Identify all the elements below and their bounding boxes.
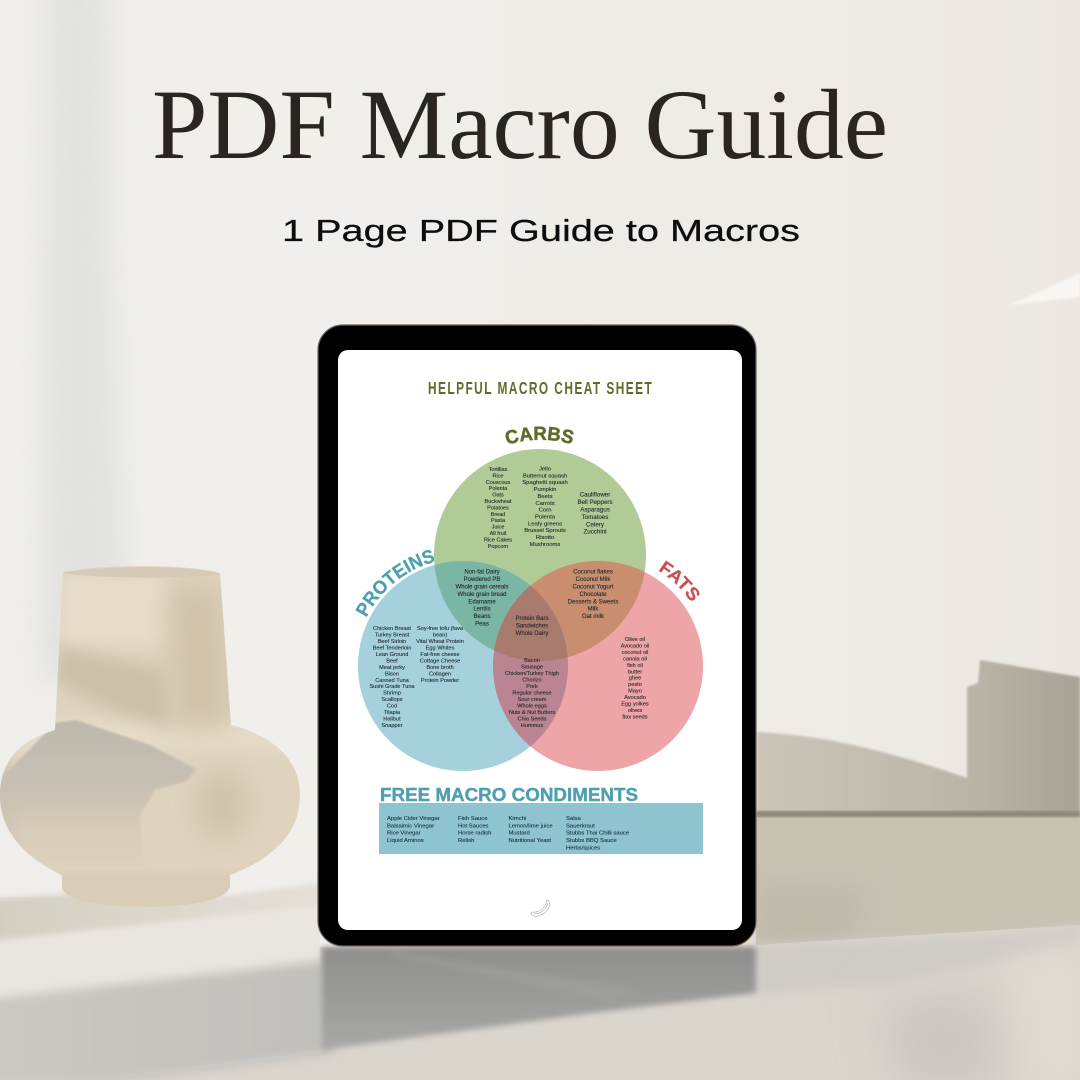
carbs list 2: Jello — [539, 466, 552, 472]
proteins list 1: Bison — [385, 671, 399, 677]
proteins list 1: Snapper — [381, 723, 403, 729]
carbs and fats list: Coconut Yogurt — [572, 584, 614, 590]
condiments column 2: Horse radish — [458, 831, 491, 837]
condiments column 4: Sauerkraut — [566, 823, 595, 829]
proteins and fats list: Nuts & Nut Butters — [509, 710, 555, 716]
proteins and fats list: Chicken/Turkey Thigh — [505, 671, 559, 677]
carbs list 2: Spaghetti squash — [522, 480, 568, 486]
tablet — [317, 324, 757, 947]
carbs list 1: All fruit — [490, 531, 507, 537]
icon: ceramic vase — [0, 560, 305, 912]
carbs list 3: Celery — [586, 521, 605, 528]
proteins list 2: Fat-free cheese — [420, 652, 460, 658]
carbs and proteins list: Non-fat Dairy — [464, 570, 500, 576]
proteins list 2: Cottage Cheese — [420, 658, 460, 664]
proteins list 1: Cod — [387, 704, 397, 710]
panel background — [379, 803, 703, 854]
carbs list 3: Asparagus — [580, 506, 610, 514]
proteins list 1: Turkey Breast — [375, 632, 410, 638]
carbs list 3: Zucchini — [583, 529, 607, 536]
carbs list 2: Corn — [539, 508, 551, 514]
carbs list 1: Bread — [491, 512, 505, 518]
proteins list 1: Beef — [386, 658, 398, 664]
subtitle: 1 Page PDF Guide to Macros — [282, 213, 800, 248]
carbs list 1: Juice — [492, 525, 504, 531]
proteins list 2: Bone broth — [426, 665, 454, 671]
proteins list 1: Beef Tenderloin — [373, 645, 411, 651]
condiments column 3: Kimchi — [508, 816, 526, 822]
fats list: butter — [628, 669, 642, 675]
condiments column 4: Herbs/spices — [566, 845, 600, 851]
label: carbs: CARBS — [506, 426, 574, 444]
proteins and fats list: Sausage — [521, 664, 543, 670]
fats list: flax seeds — [622, 714, 648, 720]
wall shadow — [757, 660, 1080, 815]
carbs list 1: Rice — [492, 473, 504, 479]
condiments panel — [379, 803, 703, 854]
fats list: Avocado oil — [621, 644, 649, 650]
condiments column 4: Stubbs BBQ Sauce — [566, 838, 617, 844]
proteins list 2: bean) — [433, 632, 447, 638]
condiments column 2: Relish — [458, 838, 474, 844]
title: PDF Macro Guide — [152, 69, 888, 180]
fats list: olives — [628, 708, 642, 714]
all three macros list: Protein Bars — [515, 616, 549, 622]
carbs list 2: Butternut squash — [523, 473, 567, 479]
carbs list 2: Mushrooms — [530, 542, 560, 548]
condiments column 3: Lemon/lime juice — [508, 823, 553, 829]
proteins list 1: Shrimp — [383, 691, 401, 697]
all three macros list: Sandwiches — [516, 623, 548, 629]
carbs list 2: Beets — [537, 494, 553, 500]
fats list: Avocado — [624, 695, 646, 701]
proteins and fats list: Pork — [526, 684, 538, 690]
carbs list 1: Rice Cakes — [484, 537, 512, 543]
condiments column 1: Balsalmic Vinegar — [387, 823, 434, 829]
carbs and proteins list: Whole grain cereals — [455, 584, 509, 590]
carbs list 3: Tomatoes — [582, 514, 608, 521]
proteins and fats list: Chorizo — [522, 678, 542, 684]
carbs and proteins list: Lentils — [473, 607, 491, 613]
carbs list 1: Potatoes — [487, 505, 509, 511]
carbs list 1: Polenta — [489, 486, 508, 492]
condiments column 4: Stubbs Thai Chilli sauce — [566, 831, 630, 837]
proteins and fats list: Sour cream — [518, 697, 547, 703]
proteins list 2: Vital Wheat Protein — [416, 639, 464, 645]
overlap: carbs and fats — [494, 561, 644, 658]
carbs and fats list: Coconut flakes — [573, 570, 613, 576]
carbs and proteins list: Peas — [475, 622, 489, 628]
carbs and fats list: Milk — [588, 607, 599, 613]
carbs and proteins list: Whole grain bread — [457, 592, 507, 598]
venn diagram — [355, 426, 703, 771]
proteins list 1: Canned Tuna — [375, 678, 410, 684]
carbs list 2: Polenta — [535, 514, 556, 520]
proteins list 1: Tilapia — [384, 710, 401, 716]
proteins and fats list: Whole eggs — [517, 704, 547, 710]
proteins list 1: Lean Ground — [376, 652, 408, 658]
fats list: canola oil — [623, 656, 647, 662]
carbs list 2: Risotto — [536, 535, 555, 541]
proteins list 2: Egg Whites — [426, 645, 455, 651]
proteins list 2: Soy-free tofu (fava — [417, 626, 464, 632]
condiments column 2: Fish Sauce — [458, 816, 488, 822]
carbs list 3: Bell Peppers — [577, 499, 613, 506]
overlap: all three — [494, 586, 568, 661]
proteins and fats list: Regular cheese — [512, 690, 552, 696]
condiments column 2: Hot Sauces — [458, 823, 489, 829]
label: fats: FATS — [658, 560, 700, 601]
tablet screen — [338, 350, 742, 930]
carbs and fats list: Oat milk — [582, 614, 605, 620]
cheat sheet heading: HELPFUL MACRO CHEAT SHEET — [428, 379, 652, 399]
proteins list 1: Scallops — [381, 697, 403, 703]
fats list: pesto — [628, 682, 642, 688]
proteins list 1: Beef Sirloin — [378, 639, 406, 645]
carbs list 2: Brussel Sprouts — [524, 528, 566, 534]
condiments column 3: Nutritional Yeast — [508, 838, 551, 844]
carbs and fats list: Desserts & Sweets — [568, 599, 618, 605]
condiments column 1: Rice Vinegar — [387, 831, 421, 837]
fats list: Mayo — [628, 689, 642, 695]
carbs list 3: Cauliflower — [580, 492, 610, 499]
tablet frame — [318, 325, 756, 946]
proteins and fats list: Hummus — [521, 723, 543, 729]
carbs and proteins list: Edamame — [468, 599, 496, 605]
carbs and fats list: Chocolate — [579, 592, 607, 598]
circle: carbs — [434, 449, 646, 661]
carbs list 1: Oats — [492, 493, 504, 499]
proteins list 2: Protein Powder — [421, 678, 459, 684]
carbs and proteins list: Beans — [473, 614, 491, 620]
circle: proteins — [358, 561, 568, 771]
carbs list 2: Pumpkin — [534, 487, 556, 493]
fats list: Egg yolkes — [621, 702, 649, 708]
proteins list 1: Chicken Breast — [373, 626, 411, 632]
fats list: Olive oil — [625, 637, 645, 643]
condiments column 1: Apple Cider Vinegar — [387, 816, 440, 822]
overlap: proteins and fats — [493, 590, 568, 746]
carbs list 1: Pasta — [491, 518, 506, 524]
proteins list 1: Halibut — [383, 717, 401, 723]
proteins list 2: Collagen — [429, 671, 451, 677]
proteins list 1: Sushi Grade Tuna — [369, 684, 415, 690]
circle: fats — [493, 561, 703, 771]
carbs list 2: Leafy greens — [528, 521, 562, 527]
fats list: coconut oil — [622, 650, 648, 656]
all three macros list: Whole Dairy — [516, 631, 548, 637]
overlap: carbs and proteins — [434, 561, 530, 650]
free macro condiments heading: FREE MACRO CONDIMENTS — [380, 785, 638, 805]
proteins and fats list: Bacon — [524, 658, 540, 664]
icon: banana — [531, 900, 549, 916]
proteins list 1: Meat jerky — [379, 665, 405, 671]
carbs list 1: Couscous — [486, 480, 510, 486]
fats list: fish oil — [627, 663, 643, 669]
carbs and fats list: Coconut Milk — [576, 577, 611, 583]
carbs list 1: Buckwheat — [485, 499, 512, 505]
tablet reflection on table — [322, 947, 756, 1050]
carbs and proteins list: Powdered PB — [464, 577, 500, 583]
proteins and fats list: Chia Seeds — [518, 716, 547, 722]
carbs list 1: Popcorn — [488, 544, 508, 550]
label: proteins: PROTEINS — [355, 550, 434, 617]
fats list: ghee — [629, 676, 641, 682]
condiments column 4: Salsa — [566, 816, 581, 822]
carbs list 2: Carrots — [535, 501, 555, 507]
table surface — [0, 897, 320, 1080]
condiments column 3: Mustard — [508, 831, 530, 837]
condiments column 1: Liquid Aminos — [387, 838, 424, 844]
carbs list 1: Tortillas — [489, 467, 508, 473]
